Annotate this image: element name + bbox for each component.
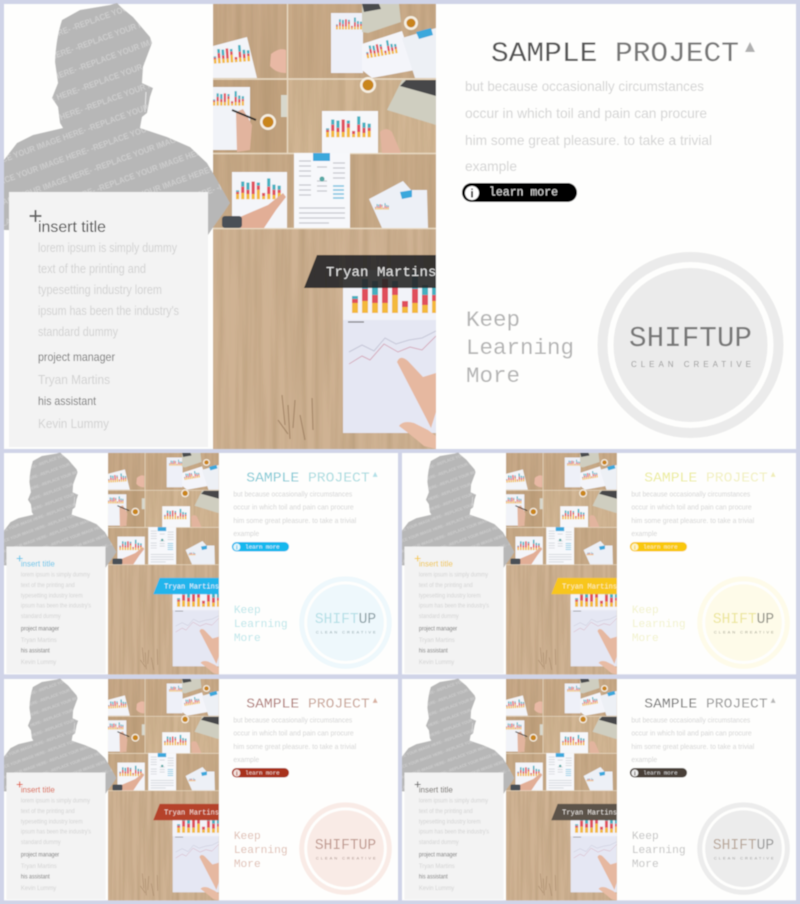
panel body text: text of the printing and <box>419 808 473 815</box>
logo badge <box>602 257 778 433</box>
description text: example <box>465 158 517 174</box>
name tag: Tryan Martins <box>326 265 437 281</box>
description text: but because occasionally circumstances <box>233 717 353 724</box>
role list <box>21 853 59 892</box>
slide: red variant <box>4 678 398 901</box>
button: learn more <box>232 768 289 777</box>
panel body text: ipsum has been the industry's <box>419 603 489 610</box>
panel body text <box>419 797 489 846</box>
tagline <box>466 307 574 389</box>
role list <box>419 627 457 666</box>
tagline: More <box>466 363 520 389</box>
tagline <box>632 831 686 871</box>
description text: him some great pleasure. to take a trivial <box>631 744 755 751</box>
name tag <box>304 255 437 288</box>
tagline: Learning <box>234 619 288 631</box>
icon: plus <box>415 781 421 787</box>
role list: his assistant <box>21 648 50 654</box>
button: learn more <box>462 183 577 202</box>
description text: example <box>233 757 259 764</box>
title: SAMPLE PROJECT <box>644 696 768 712</box>
description text <box>465 78 712 174</box>
logo badge: CLEAN CREATIVE <box>631 360 751 369</box>
description text <box>233 717 357 764</box>
description text: occur in which toil and pain can procure <box>465 105 707 121</box>
role list: project manager <box>21 627 59 633</box>
panel body text: standard dummy <box>419 613 459 620</box>
panel body text: typesetting industry lorem <box>21 818 83 825</box>
panel body text: ipsum has been the industry's <box>21 603 91 610</box>
description text <box>233 491 357 538</box>
description text: him some great pleasure. to take a trivial <box>233 744 357 751</box>
tagline: More <box>234 633 261 645</box>
panel body text: ipsum has been the industry's <box>38 304 179 318</box>
tagline: Keep <box>632 831 659 843</box>
role list: Kevin Lummy <box>419 885 455 892</box>
role list: Tryan Martins <box>21 863 57 870</box>
slide: yellow variant <box>402 452 796 675</box>
role list: Tryan Martins <box>21 637 57 644</box>
description text: occur in which toil and pain can procure <box>631 505 752 512</box>
person silhouette placeholder <box>357 638 585 814</box>
role list <box>21 627 59 666</box>
icon: plus <box>17 781 23 787</box>
name tag: Tryan Martins <box>562 583 617 591</box>
icon: triangle <box>771 472 776 477</box>
panel body text: text of the printing and <box>21 808 75 815</box>
role list: Tryan Martins <box>38 372 110 387</box>
panel: project info <box>9 192 208 447</box>
panel body text <box>38 241 179 339</box>
role list: Kevin Lummy <box>21 659 57 666</box>
icon: triangle <box>373 472 378 477</box>
tagline: Learning <box>632 845 686 857</box>
panel body text: text of the printing and <box>38 262 146 276</box>
role list: his assistant <box>21 874 50 880</box>
person silhouette placeholder <box>0 412 187 588</box>
description text: occur in which toil and pain can procure <box>233 505 354 512</box>
tagline: Keep <box>234 605 261 617</box>
person silhouette placeholder <box>0 0 371 275</box>
panel body text: standard dummy <box>419 839 459 846</box>
panel body text <box>419 571 489 620</box>
tagline: More <box>234 859 261 871</box>
description text <box>631 491 755 538</box>
title: SAMPLE PROJECT <box>491 39 739 70</box>
description text: but because occasionally circumstances <box>631 491 751 498</box>
role list <box>38 350 115 431</box>
name tag: Tryan Martins <box>164 583 219 591</box>
button: learn more <box>630 542 687 551</box>
panel body text: text of the printing and <box>419 582 473 589</box>
icon: plus <box>415 555 421 561</box>
role list: Tryan Martins <box>419 637 455 644</box>
button: learn more <box>630 768 687 777</box>
logo badge: CLEAN CREATIVE <box>316 630 376 635</box>
title: SAMPLE PROJECT <box>246 696 370 712</box>
logo badge: SHIFTUP <box>629 322 752 355</box>
description text: but because occasionally circumstances <box>631 717 751 724</box>
tagline: Keep <box>632 605 659 617</box>
panel body text: standard dummy <box>38 325 119 339</box>
panel body text <box>21 797 91 846</box>
panel body text: lorem ipsum is simply dummy <box>21 797 91 804</box>
icon: triangle <box>373 698 378 703</box>
name tag <box>551 804 617 820</box>
panel body text: typesetting industry lorem <box>419 818 481 825</box>
button: learn more: i <box>236 771 238 777</box>
name tag: Tryan Martins <box>562 809 617 817</box>
description text: him some great pleasure. to take a trivial <box>465 132 712 148</box>
photo collage <box>108 453 220 674</box>
panel body text <box>21 571 91 620</box>
button: learn more: learn more <box>643 543 678 550</box>
button: learn more: learn more <box>489 186 558 200</box>
icon: plus <box>30 210 42 222</box>
description text: example <box>631 757 657 764</box>
description text: but because occasionally circumstances <box>233 491 353 498</box>
button: learn more: i <box>236 545 238 551</box>
panel body text: lorem ipsum is simply dummy <box>21 571 91 578</box>
panel: project info <box>6 547 105 673</box>
photo collage <box>506 679 618 900</box>
role list: his assistant <box>419 648 448 654</box>
panel body text: ipsum has been the industry's <box>419 829 489 836</box>
panel: project info <box>404 773 503 899</box>
icon: triangle <box>745 42 755 52</box>
logo badge: CLEAN CREATIVE <box>714 630 774 635</box>
role list: Kevin Lummy <box>419 659 455 666</box>
role list: Kevin Lummy <box>38 416 109 431</box>
panel title: insert title <box>419 785 453 794</box>
button: learn more: learn more <box>245 769 280 776</box>
description text: him some great pleasure. to take a trivial <box>233 518 357 525</box>
logo badge <box>302 805 389 892</box>
role list: Kevin Lummy <box>21 885 57 892</box>
role list: his assistant <box>38 394 97 408</box>
role list: project manager <box>419 627 457 633</box>
logo badge: SHIFTUP <box>713 838 774 854</box>
description text: him some great pleasure. to take a trivial <box>631 518 755 525</box>
button: learn more: learn more <box>245 543 280 550</box>
name tag: Tryan Martins <box>164 809 219 817</box>
panel body text: lorem ipsum is simply dummy <box>38 241 178 255</box>
logo badge <box>700 579 787 666</box>
photo collage <box>213 4 438 449</box>
panel body text: text of the printing and <box>21 582 75 589</box>
description text: occur in which toil and pain can procure <box>233 731 354 738</box>
role list <box>419 853 457 892</box>
button: learn more: i <box>634 771 636 777</box>
tagline <box>234 605 288 645</box>
main slide: black variant <box>0 0 796 449</box>
panel title: insert title <box>21 785 55 794</box>
icon: triangle <box>771 698 776 703</box>
tagline: Keep <box>466 307 520 333</box>
panel body text: typesetting industry lorem <box>419 592 481 599</box>
description text: example <box>233 531 259 538</box>
button: learn more <box>232 542 289 551</box>
role list: his assistant <box>419 874 448 880</box>
role list: project manager <box>38 350 115 364</box>
logo badge: CLEAN CREATIVE <box>714 856 774 861</box>
tagline <box>234 831 288 871</box>
panel title: insert title <box>38 219 106 236</box>
panel: project info <box>6 773 105 899</box>
logo badge: SHIFTUP <box>315 838 376 854</box>
logo badge: SHIFTUP <box>713 612 774 628</box>
title: SAMPLE PROJECT <box>246 470 370 486</box>
logo badge: SHIFTUP <box>315 612 376 628</box>
description text: but because occasionally circumstances <box>465 78 704 94</box>
slide: brown variant <box>402 678 796 901</box>
icon: plus <box>17 555 23 561</box>
role list: project manager <box>419 853 457 859</box>
tagline: Learning <box>234 845 288 857</box>
panel body text: typesetting industry lorem <box>21 592 83 599</box>
tagline <box>632 605 686 645</box>
person silhouette placeholder <box>357 412 585 588</box>
button: learn more: i <box>470 186 474 200</box>
panel: project info <box>404 547 503 673</box>
logo badge: CLEAN CREATIVE <box>316 856 376 861</box>
panel body text: lorem ipsum is simply dummy <box>419 571 489 578</box>
logo badge <box>700 805 787 892</box>
photo collage <box>506 453 618 674</box>
panel body text: standard dummy <box>21 613 61 620</box>
tagline: Learning <box>466 335 574 361</box>
tagline: More <box>632 859 659 871</box>
description text <box>631 717 755 764</box>
person silhouette placeholder <box>0 638 187 814</box>
tagline: Keep <box>234 831 261 843</box>
panel body text: ipsum has been the industry's <box>21 829 91 836</box>
panel body text: standard dummy <box>21 839 61 846</box>
button: learn more: learn more <box>643 769 678 776</box>
description text: example <box>631 531 657 538</box>
name tag <box>551 578 617 594</box>
name tag <box>153 578 219 594</box>
role list: project manager <box>21 853 59 859</box>
name tag <box>153 804 219 820</box>
role list: Tryan Martins <box>419 863 455 870</box>
panel body text: lorem ipsum is simply dummy <box>419 797 489 804</box>
panel title: insert title <box>419 559 453 568</box>
logo badge <box>302 579 389 666</box>
panel title: insert title <box>21 559 55 568</box>
panel body text: typesetting industry lorem <box>38 283 162 297</box>
title: SAMPLE PROJECT <box>644 470 768 486</box>
tagline: Learning <box>632 619 686 631</box>
button: learn more: i <box>634 545 636 551</box>
photo collage <box>108 679 220 900</box>
tagline: More <box>632 633 659 645</box>
description text: occur in which toil and pain can procure <box>631 731 752 738</box>
slide: blue variant <box>4 452 398 675</box>
